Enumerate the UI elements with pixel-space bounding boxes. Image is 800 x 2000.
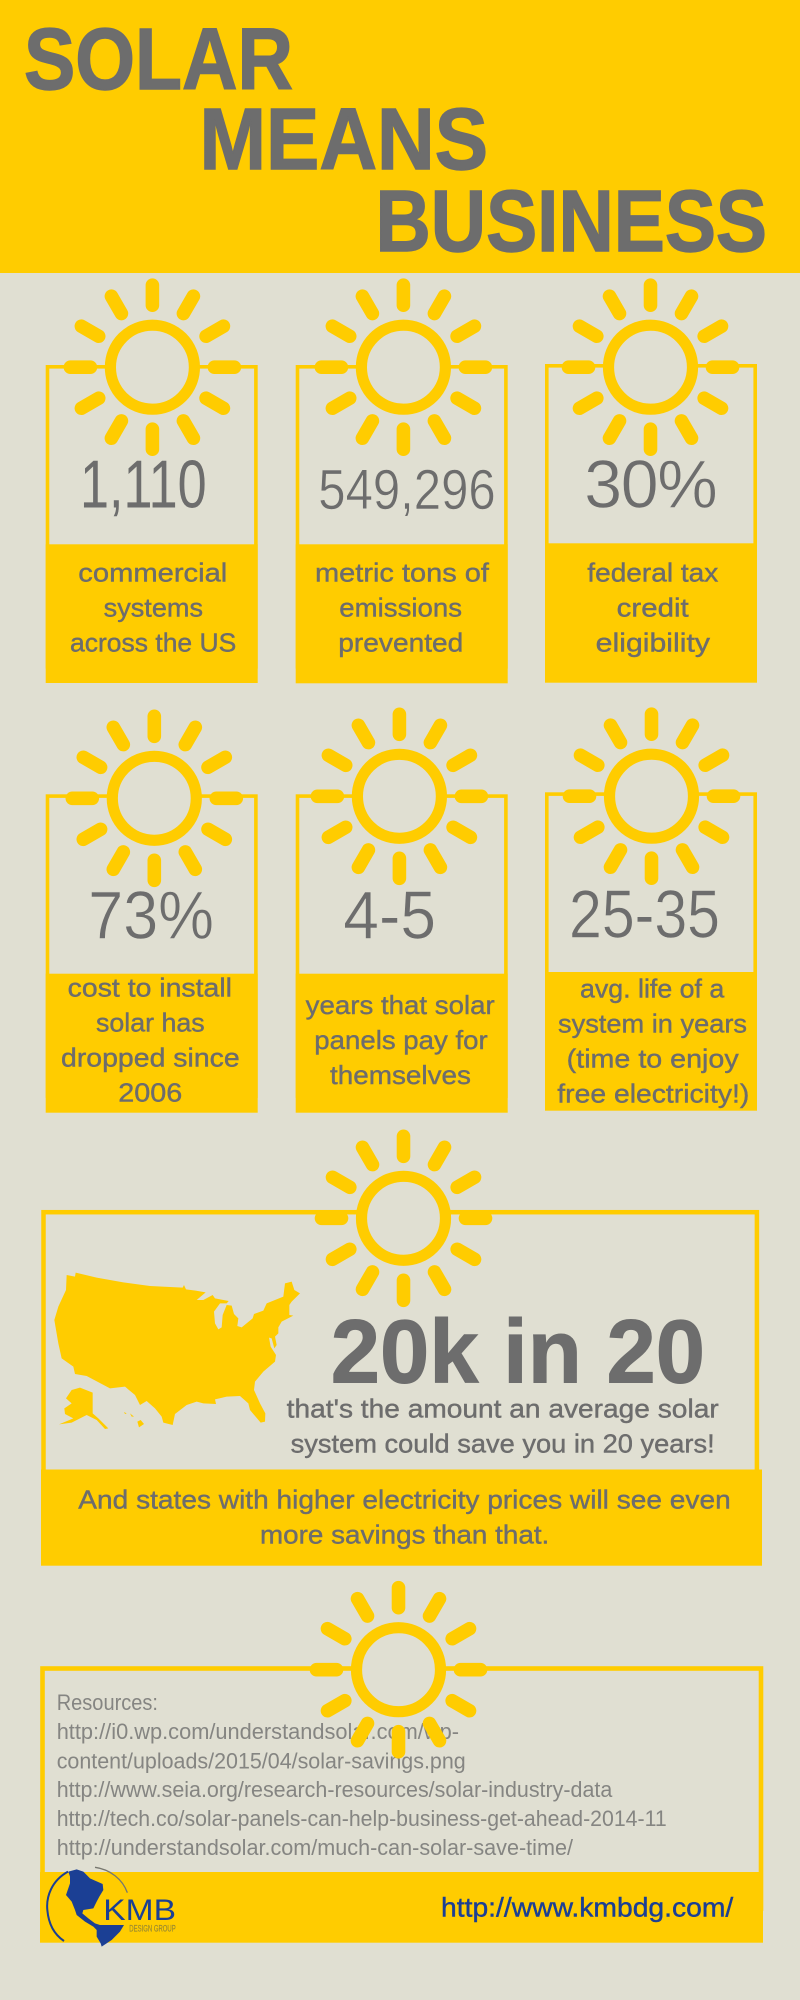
icon: sun xyxy=(568,285,732,449)
panel: resources xyxy=(40,1588,763,1947)
savings description: that's the amount an average solar xyxy=(287,1394,719,1424)
caption text xyxy=(61,973,240,1108)
footer bar xyxy=(40,1872,763,1943)
callout: higher electricity prices: And states with higher electricity prices will see even xyxy=(78,1484,731,1514)
icon: sun xyxy=(570,714,734,878)
panel: 20k savings xyxy=(41,1136,762,1566)
panel: payback years xyxy=(296,714,508,1113)
resource links text: http://www.seia.org/research-resources/solar-industry-data xyxy=(57,1777,613,1802)
caption background xyxy=(296,544,508,683)
caption text: across the US xyxy=(70,628,236,658)
website link: http://www.kmbdg.com/ xyxy=(441,1893,734,1923)
title banner xyxy=(0,0,800,273)
caption text: systems xyxy=(104,593,203,623)
caption text: metric tons of xyxy=(315,558,490,588)
icon: sun xyxy=(317,714,481,878)
stat number: 1,110 xyxy=(80,446,207,522)
caption text: emissions xyxy=(339,593,462,623)
stat number: 25-35 xyxy=(569,876,720,952)
caption text: (time to enjoy xyxy=(567,1044,739,1074)
caption text: federal tax xyxy=(587,558,718,588)
icon: sun xyxy=(322,1136,486,1300)
caption text xyxy=(70,558,236,658)
caption background xyxy=(46,544,258,683)
panel: federal tax credit xyxy=(545,285,757,683)
stat number: 30% xyxy=(584,446,718,522)
logo: KMB Design Group: DESIGN GROUP xyxy=(129,1924,176,1934)
caption background xyxy=(46,974,258,1113)
caption text xyxy=(306,990,495,1090)
caption background xyxy=(545,972,757,1111)
callout: higher electricity prices: more savings than that. xyxy=(260,1519,549,1549)
caption text: 2006 xyxy=(118,1078,182,1108)
stat number: 73% xyxy=(88,878,214,954)
resource links text: Resources: xyxy=(57,1690,158,1715)
resource links text xyxy=(57,1690,667,1860)
savings description xyxy=(287,1394,719,1459)
icon: sun xyxy=(70,285,234,449)
icon: sun xyxy=(316,1588,480,1752)
title line: MEANS: MEANS xyxy=(200,91,488,188)
panel: system lifetime xyxy=(545,714,757,1111)
title line: SOLAR: SOLAR xyxy=(24,11,293,108)
caption text: panels pay for xyxy=(314,1025,488,1055)
panel: emissions prevented xyxy=(296,285,508,683)
caption text xyxy=(557,974,749,1109)
caption text: prevented xyxy=(338,628,463,658)
logo: KMB Design Group: KMB xyxy=(103,1894,176,1927)
map: United States xyxy=(54,1273,300,1429)
caption text xyxy=(315,558,490,658)
resource links text: http://tech.co/solar-panels-can-help-business-get-ahead-2014-11 xyxy=(57,1806,667,1831)
caption text: dropped since xyxy=(61,1043,240,1073)
caption background xyxy=(545,543,757,683)
panel: commercial systems xyxy=(46,285,258,683)
caption text: themselves xyxy=(330,1060,471,1090)
icon: sun xyxy=(72,716,236,880)
caption text: free electricity!) xyxy=(557,1079,749,1109)
caption text: eligibility xyxy=(596,628,710,658)
caption text: credit xyxy=(617,593,690,623)
callout: higher electricity prices xyxy=(41,1470,762,1566)
stat number: 4-5 xyxy=(343,878,436,954)
savings description: system could save you in 20 years! xyxy=(291,1429,715,1459)
caption text: solar has xyxy=(96,1008,205,1038)
caption text: system in years xyxy=(558,1009,747,1039)
headline: 20k in 20: 20k in 20 xyxy=(331,1302,705,1402)
caption text: commercial xyxy=(78,558,227,588)
resource links text: http://i0.wp.com/understandsolar.com/wp- xyxy=(57,1719,459,1744)
stat number: 549,296 xyxy=(318,458,496,522)
caption background xyxy=(296,974,508,1113)
resource links text: http://understandsolar.com/much-can-solar-save-time/ xyxy=(57,1835,574,1860)
resource links text: content/uploads/2015/04/solar-savings.png xyxy=(57,1748,466,1773)
caption text: avg. life of a xyxy=(580,974,725,1004)
logo: KMB Design Group xyxy=(47,1867,176,1947)
caption text: cost to install xyxy=(68,973,232,1003)
caption text: years that solar xyxy=(306,990,495,1020)
caption text xyxy=(587,558,718,658)
panel: cost to install xyxy=(46,716,258,1113)
icon: sun xyxy=(321,285,485,449)
